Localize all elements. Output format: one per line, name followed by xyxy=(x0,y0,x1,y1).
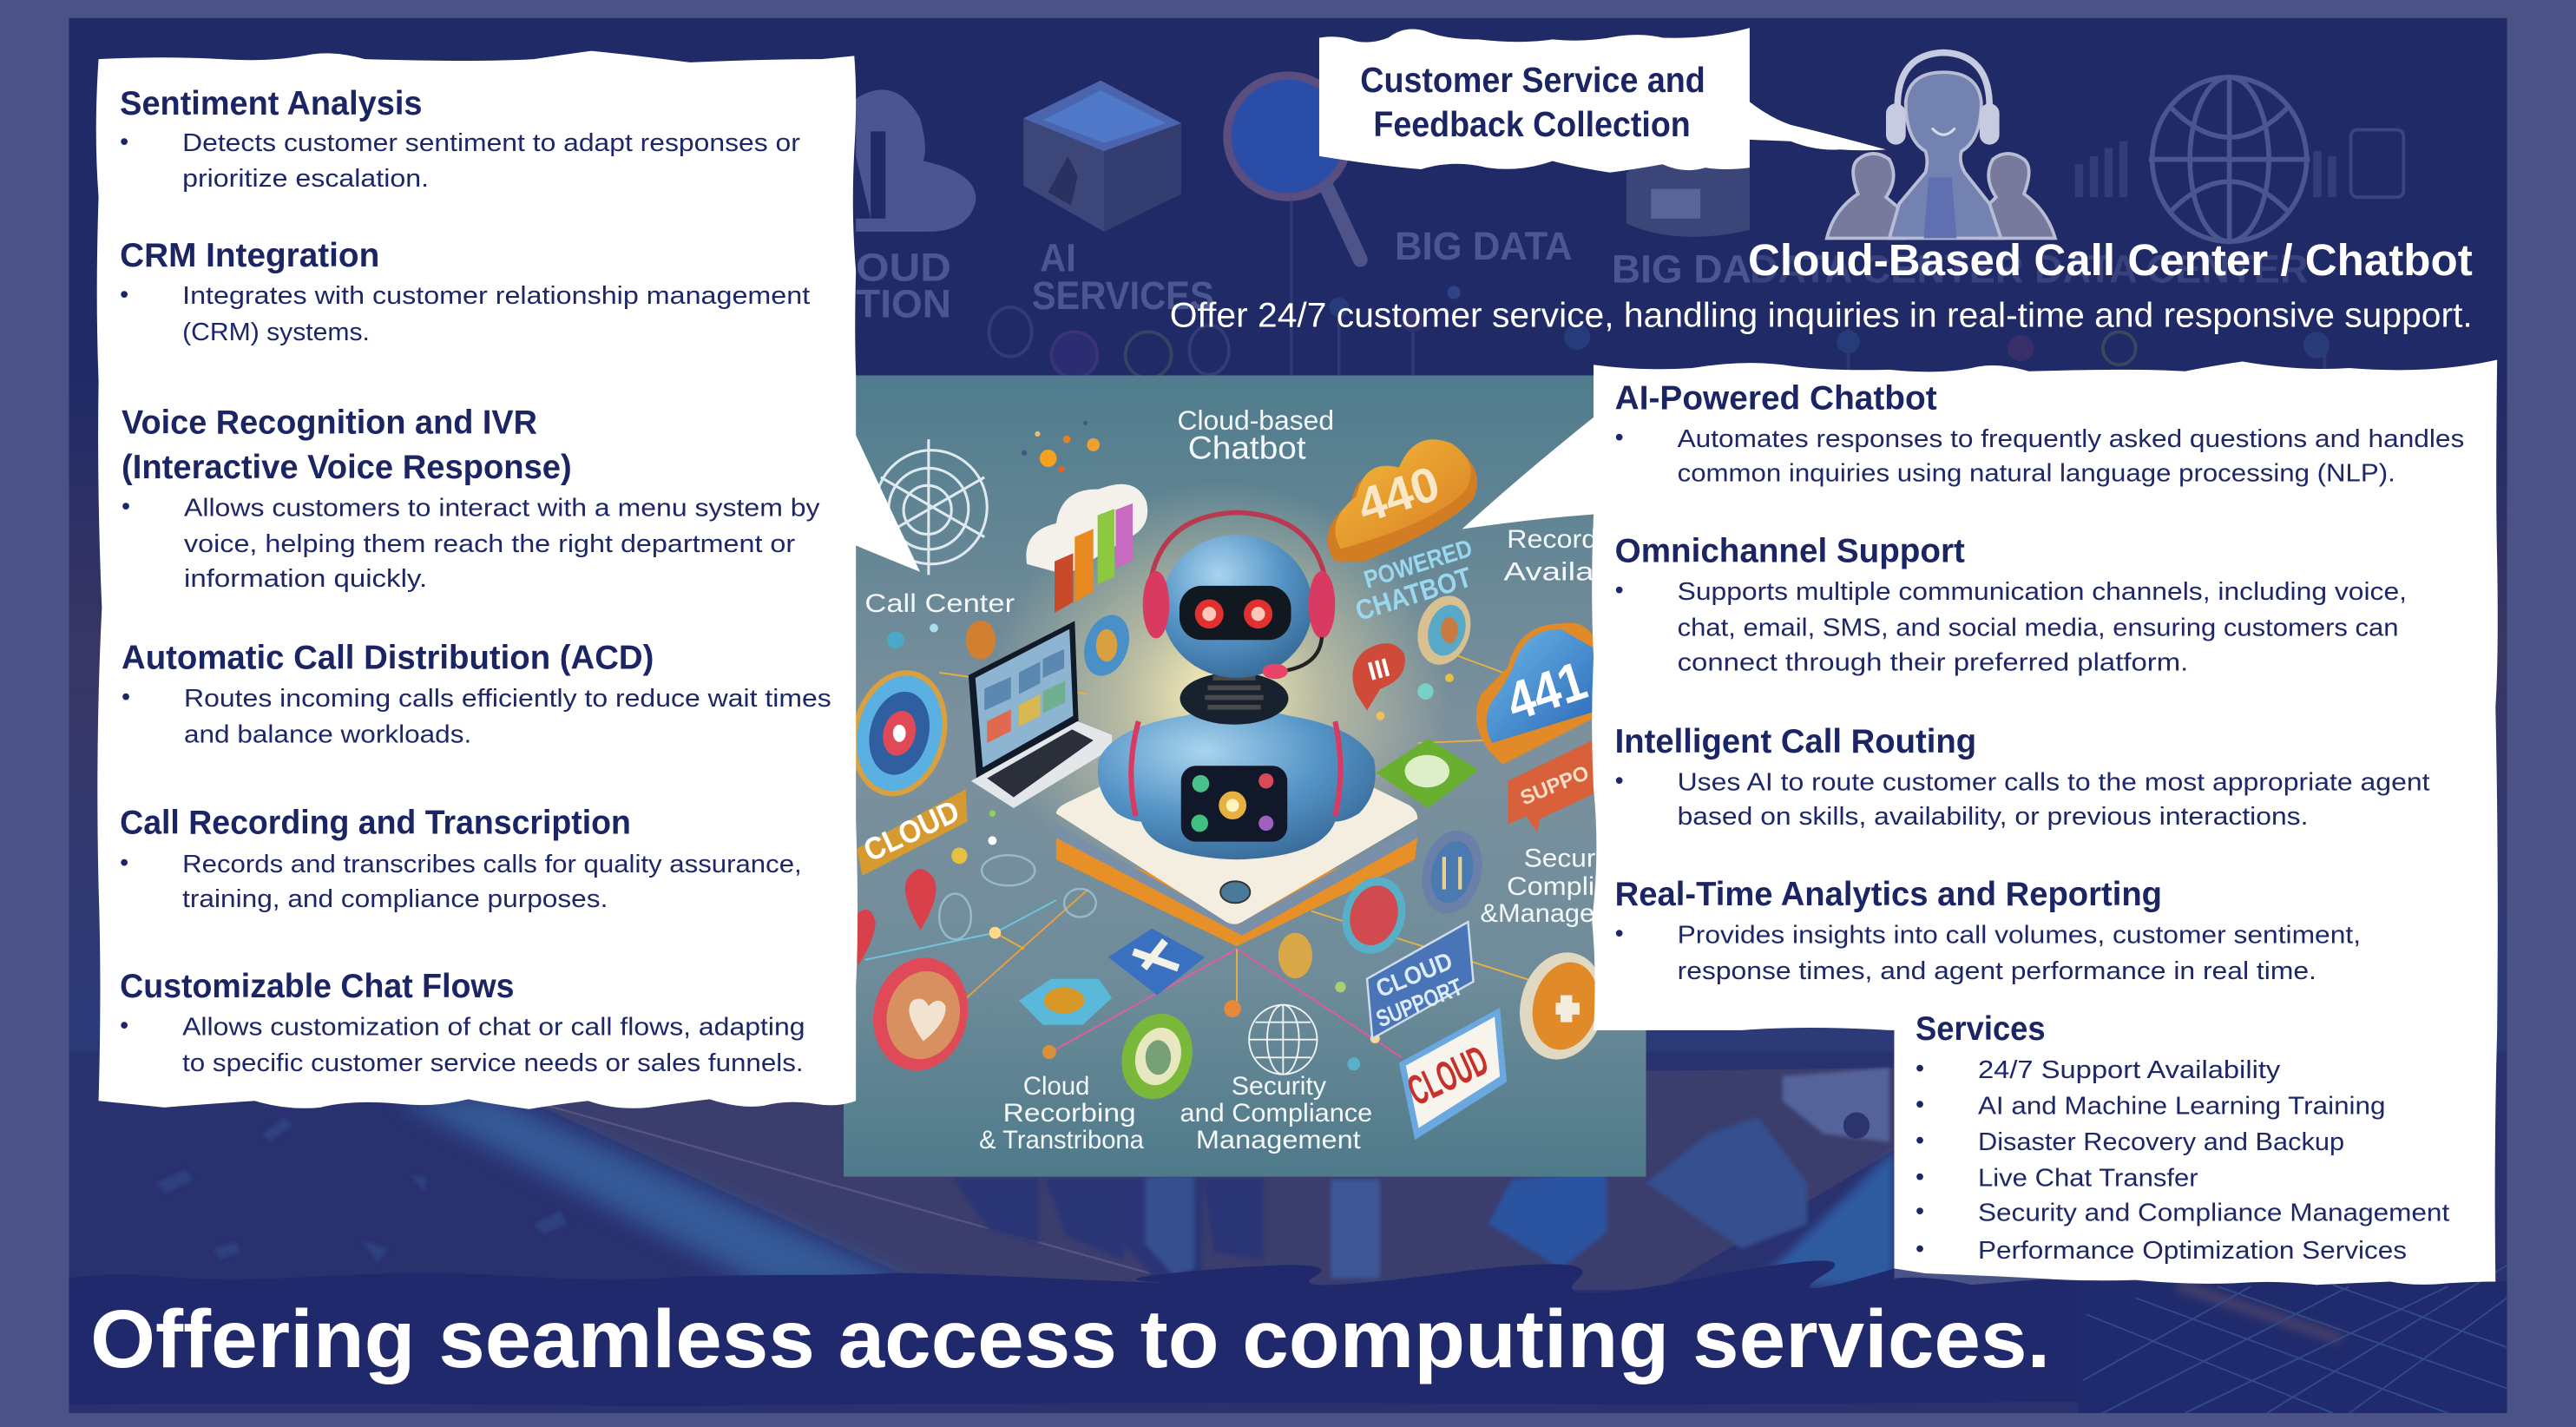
icon: small target xyxy=(1084,615,1130,676)
section: intelligent call routing: Intelligent Call Routing xyxy=(1615,723,1976,760)
icon: laptop xyxy=(969,621,1112,808)
robot headset xyxy=(1143,512,1335,679)
icon: concentric badge xyxy=(1410,589,1479,672)
section: services list: Performance Optimization Services xyxy=(1978,1237,2407,1265)
section: services list: • xyxy=(1916,1235,1924,1263)
faint background icons xyxy=(856,76,2403,378)
section: real-time analytics: • xyxy=(1615,920,1624,948)
faint label: services: SERVICES xyxy=(1032,273,1214,318)
icon: radar rings xyxy=(876,439,987,575)
icon: orange cloud 440: 440 xyxy=(1351,456,1446,534)
section: intelligent call routing: • xyxy=(1615,767,1624,795)
icon: orange cloud 440 xyxy=(1327,439,1477,562)
section: voice recognition: Voice Recognition and IVR xyxy=(122,404,537,442)
icon: shield badge xyxy=(1413,824,1491,921)
label: security and compliance management xyxy=(1180,1072,1372,1154)
section: ai-powered chatbot xyxy=(1615,379,2464,488)
icon: support agent group xyxy=(1827,53,2055,238)
sign: cloud red xyxy=(1399,1008,1507,1140)
icon: red speech bubble xyxy=(1352,643,1405,710)
robot neck spring xyxy=(1205,678,1264,707)
icon: heart badge xyxy=(1333,869,1415,963)
robot body xyxy=(1098,709,1376,859)
icon: blue cloud 441 xyxy=(1476,623,1598,765)
callout: customer service and feedback collection xyxy=(1319,28,1886,173)
section: services list: • xyxy=(1916,1127,1924,1154)
icon: coin xyxy=(1278,933,1312,978)
icon: wireframe globe xyxy=(1249,1005,1318,1075)
section: services list: Live Chat Transfer xyxy=(1978,1165,2198,1193)
section: omnichannel support: Supports multiple communication channels, including voice, xyxy=(1678,578,2407,606)
icon: badge orange xyxy=(966,621,996,660)
side agent right xyxy=(1980,154,2055,238)
label: security compliance management right xyxy=(1481,844,1596,928)
section: customizable chat flows: to specific customer service needs or sales funnels. xyxy=(182,1049,804,1077)
section: omnichannel support: Omnichannel Support xyxy=(1615,532,1965,569)
section: services list: • xyxy=(1916,1163,1924,1191)
services panel shadow strip xyxy=(1894,1266,2054,1285)
section: ai-powered chatbot: common inquiries using natural language processing (NLP). xyxy=(1678,460,2395,488)
glow behind robot xyxy=(1014,496,1433,871)
section: services list xyxy=(1916,1010,2449,1265)
subtitle: Offer 24/7 customer service, handling inquiries in real-time and responsive support. xyxy=(1170,297,2473,335)
faint label: AI: AI xyxy=(1040,235,1076,279)
section: voice recognition: Allows customers to interact with a menu system by xyxy=(184,494,820,522)
section: crm integration: CRM Integration xyxy=(120,237,379,274)
label: powered chatbot: CHATBOT xyxy=(1352,561,1475,627)
section: services list: Services xyxy=(1916,1010,2046,1048)
platform xyxy=(1055,786,1418,936)
callout text: Customer Service and xyxy=(1360,60,1705,100)
sign: cloud red: CLOUD xyxy=(1401,1036,1495,1115)
section: intelligent call routing: Uses AI to route customer calls to the most appropriate agent xyxy=(1678,768,2430,796)
side agent left xyxy=(1827,154,1906,238)
section: customizable chat flows xyxy=(120,968,805,1077)
robot chest screen xyxy=(1181,766,1287,842)
robot neck socket xyxy=(1180,673,1288,725)
label: call center: Call Center xyxy=(864,589,1015,618)
section: services list: • xyxy=(1916,1091,1924,1119)
section: voice recognition: (Interactive Voice Response) xyxy=(122,449,572,486)
icon: magnifier xyxy=(1227,76,1360,260)
section: automatic call distribution: and balance workloads. xyxy=(184,721,471,749)
label: record availability xyxy=(1503,525,1597,587)
section: services list: • xyxy=(1916,1055,1924,1082)
section: real-time analytics: Provides insights into call volumes, customer sentiment, xyxy=(1678,922,2361,950)
icon: database cylinder xyxy=(1626,99,1750,237)
section: automatic call distribution: Routes incoming calls efficiently to reduce wait times xyxy=(184,685,831,713)
sign: cloud support xyxy=(1367,922,1474,1038)
icon: flower xyxy=(1019,979,1112,1025)
robot xyxy=(1098,512,1376,859)
label: record availability: Availa xyxy=(1503,557,1594,587)
tag: cloud gold: CLOUD xyxy=(858,793,964,869)
title: Cloud-Based Call Center / Chatbot xyxy=(1748,235,2473,285)
label: cloud recording and transcription: Cloud xyxy=(1023,1072,1089,1101)
faint equalizer bars and box xyxy=(2075,130,2403,197)
label: record availability: Record xyxy=(1507,525,1597,554)
label: cloud-based chatbot: Chatbot xyxy=(1188,429,1306,466)
section: sentiment analysis: prioritize escalation. xyxy=(182,165,429,193)
section: real-time analytics: Real-Time Analytics and Reporting xyxy=(1615,876,2162,913)
section: ai-powered chatbot: Automates responses to frequently asked questions and handles xyxy=(1678,425,2464,453)
faint label: data center: DATA CENTER DATA CENTER xyxy=(1750,247,2308,292)
label: security compliance management right: &Manage xyxy=(1481,899,1594,928)
icon: AI services cube xyxy=(1023,81,1181,232)
section: voice recognition: • xyxy=(122,492,130,520)
label: security compliance management right: Compli xyxy=(1507,872,1594,901)
icon: network scribbles xyxy=(939,855,1096,939)
label: security compliance management right: Secur xyxy=(1524,844,1596,872)
label: cloud recording and transcription: & Transtribona xyxy=(979,1126,1144,1154)
section: customizable chat flows: • xyxy=(120,1012,128,1040)
section: automatic call distribution xyxy=(122,639,831,749)
section: voice recognition: voice, helping them reach the right department or xyxy=(184,530,796,558)
icon: sparkle cluster xyxy=(1022,421,1100,472)
panel: right features xyxy=(1462,360,2498,1285)
glowing nodes xyxy=(887,624,1454,1070)
section: services list: Disaster Recovery and Backup xyxy=(1978,1128,2344,1156)
icon: red heart circle xyxy=(873,957,969,1071)
section: sentiment analysis: Detects customer sentiment to adapt responses or xyxy=(182,129,800,157)
icon: blue cloud 441: 441 xyxy=(1500,650,1594,733)
faint label: ation: TION xyxy=(856,281,951,326)
section: services list: Security and Compliance Management xyxy=(1978,1199,2449,1226)
icon: AI cloud xyxy=(856,89,976,232)
panel: left features xyxy=(96,51,920,1109)
section: services list: AI and Machine Learning Training xyxy=(1978,1092,2385,1120)
label: security and compliance management: Security xyxy=(1232,1072,1326,1101)
section: crm integration: • xyxy=(120,280,128,308)
section: sentiment analysis xyxy=(120,85,800,193)
section: intelligent call routing xyxy=(1615,723,2430,831)
connector lines xyxy=(864,651,1550,1057)
label: cloud-based chatbot: Cloud-based xyxy=(1177,405,1334,436)
circuit specks xyxy=(156,1117,567,1262)
section: real-time analytics xyxy=(1615,876,2361,985)
sign: cloud support: CLOUD xyxy=(1372,947,1456,1003)
orange platform layer xyxy=(1056,838,1417,946)
callout text xyxy=(1360,60,1705,144)
section: omnichannel support: • xyxy=(1615,576,1624,604)
sign: cloud support: SUPPORT xyxy=(1372,973,1466,1033)
icon: blue card xyxy=(1108,929,1205,995)
section: real-time analytics: response times, and agent performance in real time. xyxy=(1678,957,2316,985)
section: crm integration xyxy=(120,237,810,346)
section: ai-powered chatbot: AI-Powered Chatbot xyxy=(1615,379,1937,417)
section: automatic call distribution: • xyxy=(122,683,130,711)
section: sentiment analysis: • xyxy=(120,128,128,155)
faint label: big data 2: BIG DA xyxy=(1612,247,1751,292)
icon: bar chart cloud xyxy=(1026,484,1147,613)
label: cloud recording and transcription xyxy=(979,1072,1144,1154)
central agent xyxy=(1886,53,2001,238)
section: call recording: training, and compliance purposes. xyxy=(182,885,608,913)
section: customizable chat flows: Allows customization of chat or call flows, adapting xyxy=(182,1014,805,1042)
label: security and compliance management: and Compliance xyxy=(1180,1099,1372,1128)
section: ai-powered chatbot: • xyxy=(1615,424,1624,451)
headline banner xyxy=(69,1260,2078,1406)
faint label: cloud: OUD xyxy=(856,246,951,290)
section: sentiment analysis: Sentiment Analysis xyxy=(120,85,422,122)
section: call recording: Call Recording and Transcription xyxy=(120,805,631,842)
label: security and compliance management: Management xyxy=(1196,1126,1362,1154)
icon: map pin xyxy=(905,869,936,930)
icon: red speech bubble: III xyxy=(1365,653,1393,687)
section: call recording: • xyxy=(120,849,128,877)
section: crm integration: Integrates with customer relationship management xyxy=(182,282,810,310)
section: omnichannel support: connect through their preferred platform. xyxy=(1678,648,2188,676)
section: automatic call distribution: Automatic Call Distribution (ACD) xyxy=(122,639,654,676)
section: omnichannel support: chat, email, SMS, and social media, ensuring customers can xyxy=(1678,615,2399,642)
robot visor and eyes xyxy=(1180,586,1291,640)
faint label: big data: BIG DATA xyxy=(1395,224,1572,268)
headline: Offering seamless access to computing services. xyxy=(90,1293,2050,1385)
section: voice recognition xyxy=(122,404,820,593)
icon: map pin edge xyxy=(857,910,876,965)
bottom right grid xyxy=(2078,1281,2507,1413)
icon: blue target xyxy=(856,670,948,797)
label: cloud-based chatbot xyxy=(1179,410,1333,459)
section: call recording xyxy=(120,805,802,913)
label: cloud recording and transcription: Recorbing xyxy=(1003,1099,1136,1128)
section: omnichannel support xyxy=(1615,532,2407,676)
background rings row xyxy=(989,197,2330,378)
section: call recording: Records and transcribes calls for quality assurance, xyxy=(182,851,802,878)
label: powered chatbot: POWERED xyxy=(1361,534,1475,595)
section: services list: 24/7 Support Availability xyxy=(1978,1056,2281,1084)
section: services list: • xyxy=(1916,1198,1924,1226)
section: voice recognition: information quickly. xyxy=(184,565,427,593)
section: crm integration: (CRM) systems. xyxy=(182,319,370,346)
icon: orange plus badge xyxy=(1508,943,1616,1069)
icon: green card xyxy=(1376,739,1479,808)
icon: green ring xyxy=(1111,1004,1203,1108)
section: intelligent call routing: based on skills, availability, or previous interactions. xyxy=(1678,803,2308,831)
icon: globe xyxy=(2149,77,2310,241)
section: customizable chat flows: Customizable Chat Flows xyxy=(120,968,514,1005)
tag: support orange: SUPPO xyxy=(1517,761,1592,809)
illustration: cloud-based chatbot xyxy=(838,375,1646,1177)
tag: support orange xyxy=(1508,738,1598,832)
callout text: Feedback Collection xyxy=(1373,104,1691,144)
robot head xyxy=(1161,535,1312,678)
